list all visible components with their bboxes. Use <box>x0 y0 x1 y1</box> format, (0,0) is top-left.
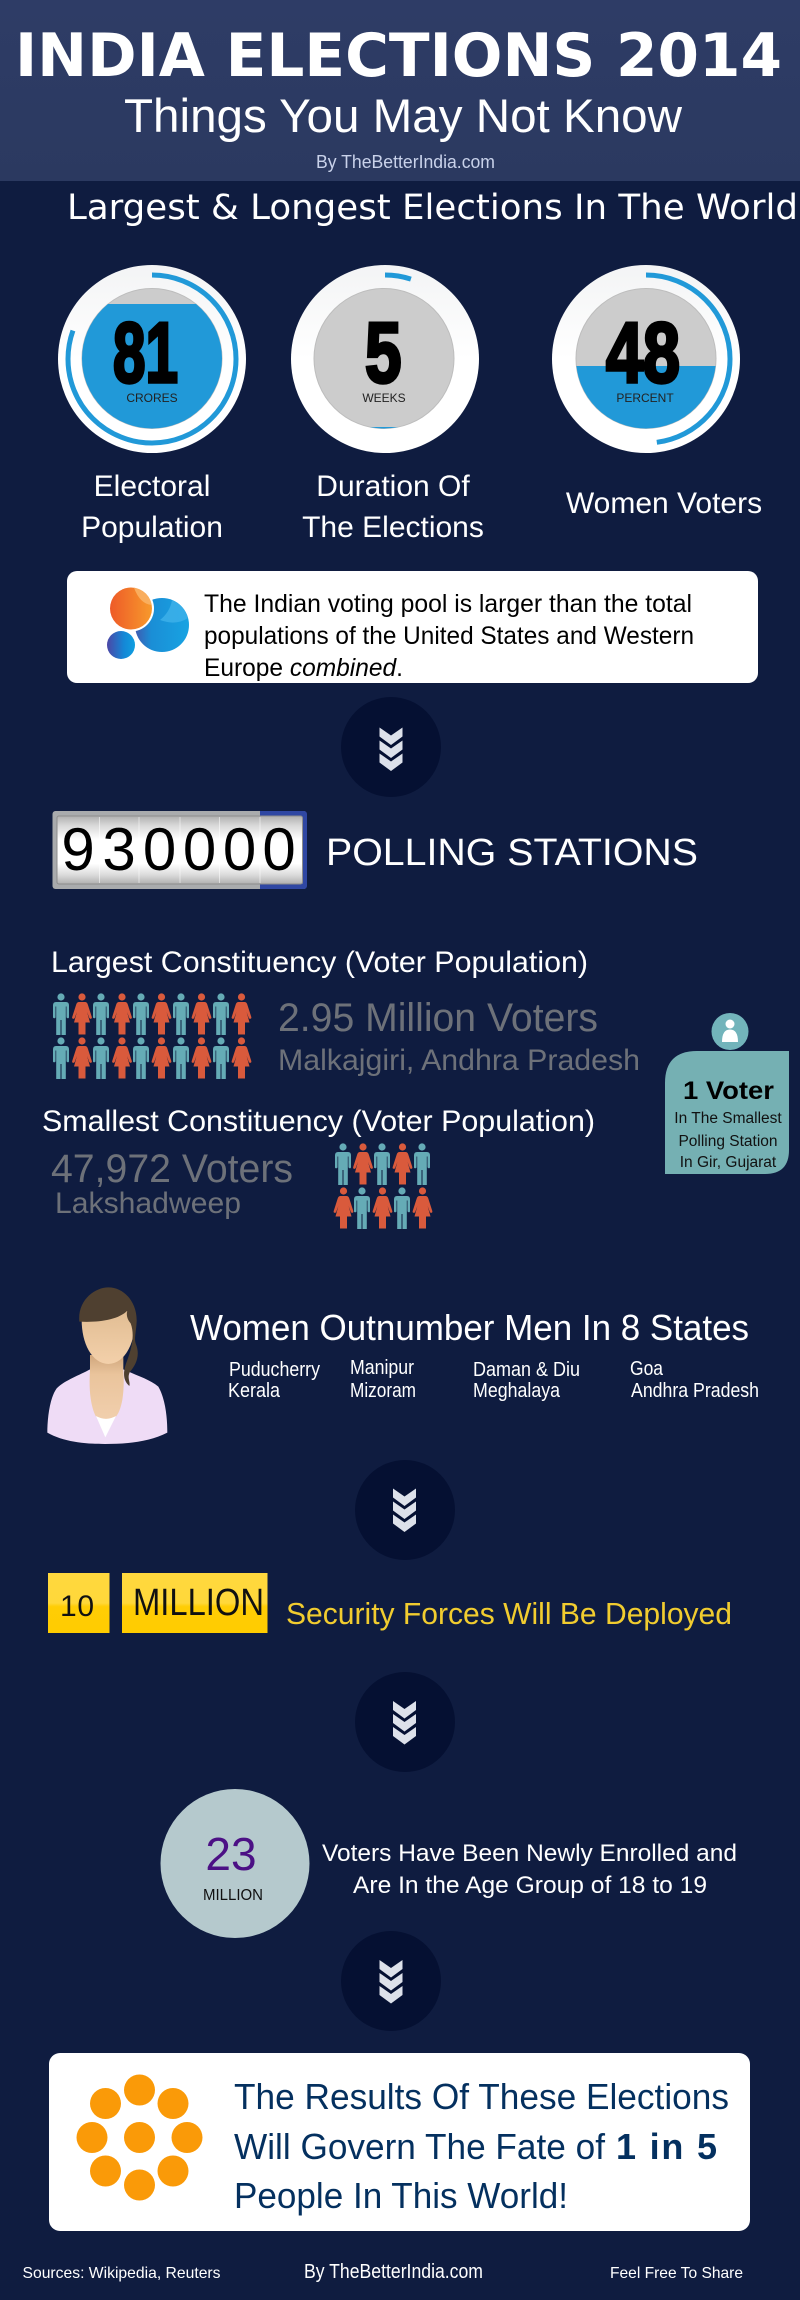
panel: results govern fate <box>49 2053 750 2231</box>
stat circle: 23 million <box>160 1789 310 1938</box>
pool text: The Indian voting pool is larger than the total <box>204 590 692 618</box>
arrow: chevrons down 1 <box>341 697 441 797</box>
label: The Elections <box>302 511 484 544</box>
list: states: Puducherry <box>229 1359 320 1381</box>
callout: 1 voter: Polling Station <box>678 1133 778 1150</box>
gauge: 48 percent women voters: 48 <box>606 306 680 401</box>
list: states: Mizoram <box>350 1380 416 1402</box>
callout: 1 voter: 1 Voter <box>683 1077 774 1105</box>
gauge: 81 crores electoral population: CRORES <box>126 391 178 405</box>
subtitle: Things You May Not Know <box>124 89 683 142</box>
stat circle: 23 million: MILLION <box>203 1887 263 1904</box>
counter: 930000: 9 <box>61 816 95 883</box>
place: Malkajgiri: Malkajgiri, Andhra Pradesh <box>278 1044 640 1077</box>
badge: 10: 10 <box>60 1590 94 1623</box>
results text: 1 in 5 <box>616 2126 717 2167</box>
pictogram: 20 voters largest <box>53 993 251 1079</box>
counter: 930000 <box>52 811 307 889</box>
section heading: largest and longest: Largest & Longest Elections In The World <box>67 188 798 228</box>
results text: Will Govern The Fate of <box>234 2126 606 2167</box>
label: Women Voters <box>566 487 762 520</box>
list: states <box>228 1357 759 1402</box>
icon: ring of dots <box>76 2074 202 2200</box>
gauge: 5 weeks duration: 5 <box>365 306 402 401</box>
gauge: 48 percent women voters: PERCENT <box>616 391 674 405</box>
results text <box>234 2076 729 2216</box>
gauge: 5 weeks duration: WEEKS <box>362 391 406 405</box>
pool text: populations of the United States and Western <box>204 622 694 650</box>
heading: women outnumber men: Women Outnumber Men In 8 States <box>190 1307 749 1348</box>
icon: woman avatar <box>47 1287 167 1444</box>
title: INDIA ELECTIONS 2014 <box>15 21 782 91</box>
callout: 1 voter: In The Smallest <box>674 1110 782 1127</box>
label: Duration Of <box>316 470 470 503</box>
heading: largest constituency: Largest Constituency (Voter Population) <box>51 946 588 979</box>
security forces text: Security Forces Will Be Deployed <box>286 1596 732 1631</box>
new voters text: Voters Have Been Newly Enrolled and <box>322 1840 737 1867</box>
stat: 47,972 voters: 47,972 Voters <box>51 1147 293 1191</box>
heading: smallest constituency: Smallest Constituency (Voter Population) <box>42 1105 595 1138</box>
label: Electoral <box>94 470 210 503</box>
pictogram: 10 voters smallest <box>334 1143 432 1229</box>
list: states: Meghalaya <box>473 1380 561 1402</box>
counter: 930000: 3 <box>102 816 136 883</box>
panel: voting pool comparison <box>67 571 758 683</box>
list: states: Daman & Diu <box>473 1359 580 1381</box>
list: states: Goa <box>630 1358 664 1380</box>
arrow: chevrons down 4 <box>341 1931 441 2031</box>
list: states: Kerala <box>228 1380 281 1402</box>
counter: 930000: 0 <box>262 816 296 883</box>
header banner <box>0 0 800 181</box>
counter: 930000: 0 <box>183 816 216 883</box>
stat circle: 23 million: 23 <box>205 1828 257 1880</box>
pool text: Europe combined. <box>204 654 403 682</box>
byline: By TheBetterIndia.com <box>316 152 495 172</box>
badge: million <box>122 1573 268 1633</box>
callout: 1 voter <box>665 1013 789 1174</box>
footer: byline: By TheBetterIndia.com <box>304 2261 483 2283</box>
gauge: 81 crores electoral population: 81 <box>113 306 178 401</box>
label: Population <box>81 511 223 544</box>
callout: 1 voter: In Gir, Gujarat <box>680 1154 777 1171</box>
gauge: 5 weeks duration <box>291 265 484 544</box>
counter: 930000: 0 <box>143 816 176 883</box>
new voters text: Are In the Age Group of 18 to 19 <box>353 1872 707 1899</box>
place: Lakshadweep: Lakshadweep <box>55 1187 241 1220</box>
gauge: 48 percent women voters <box>552 265 762 520</box>
gauge: 81 crores electoral population <box>58 265 246 544</box>
stat: 2.95 million voters: 2.95 Million Voters <box>278 996 598 1040</box>
list: states: Andhra Pradesh <box>631 1380 759 1402</box>
arrow: chevrons down 2 <box>355 1460 455 1560</box>
polling stations label: POLLING STATIONS <box>326 832 698 874</box>
counter: 930000: 0 <box>223 816 256 883</box>
icon: bubbles <box>107 586 189 659</box>
badge: 10 <box>48 1573 110 1633</box>
icon: voter <box>712 1013 748 1050</box>
badge: million: MILLION <box>133 1581 264 1624</box>
arrow: chevrons down 3 <box>355 1672 455 1772</box>
footer: share note: Feel Free To Share <box>610 2265 743 2282</box>
list: states: Manipur <box>350 1357 414 1379</box>
footer: sources: Sources: Wikipedia, Reuters <box>22 2265 220 2282</box>
results text: People In This World! <box>234 2175 568 2216</box>
results text: The Results Of These Elections <box>234 2076 729 2117</box>
